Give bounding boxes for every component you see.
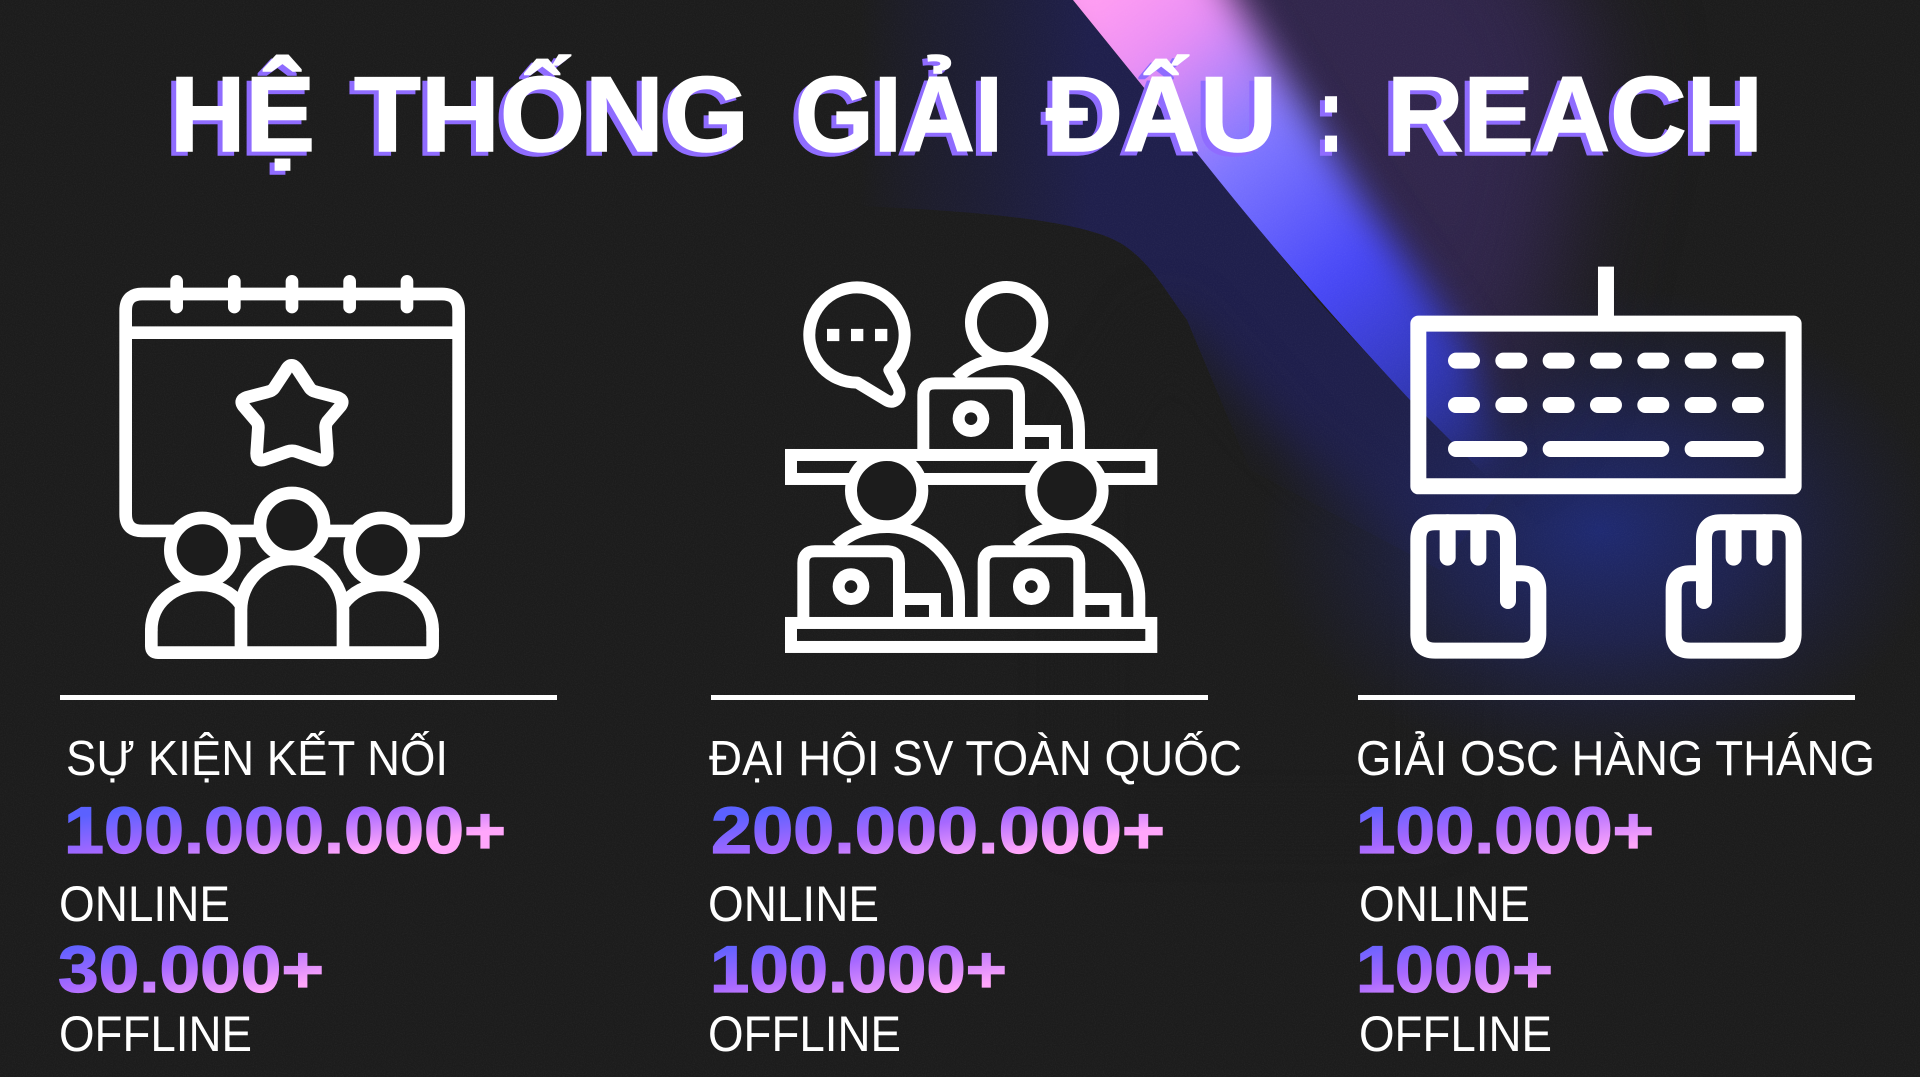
online label: ONLINE <box>1359 876 1530 932</box>
online label: ONLINE <box>59 876 230 932</box>
online number: 100.000+ <box>1356 793 1654 867</box>
title: HỆ <box>170 54 315 174</box>
panel: đại hội sv toàn quốc <box>708 695 1242 1062</box>
panel: sự kiện kết nối <box>58 695 557 1062</box>
background: navy glow left of the diagonal edge <box>860 0 1500 570</box>
offline number: 100.000+ <box>710 932 1007 1006</box>
background: soft dark fade over navy <box>1080 310 1440 820</box>
online number: 200.000.000+ <box>711 793 1165 867</box>
offline number: 30.000+ <box>58 932 324 1006</box>
online number: 100.000.000+ <box>64 793 506 867</box>
icon: people with laptops and chat bubble <box>791 287 1151 647</box>
offline label: OFFLINE <box>708 1006 901 1062</box>
background: glow below the keyboard <box>1260 285 1920 775</box>
title: GIẢI <box>795 54 1003 174</box>
title: THỐNG <box>354 54 749 174</box>
icon: calendar with star and audience <box>126 281 459 653</box>
offline number: 1000+ <box>1356 932 1553 1006</box>
heading: GIẢI OSC HÀNG THÁNG <box>1356 731 1875 786</box>
title <box>170 54 1763 174</box>
title: ĐẤU <box>1046 54 1277 174</box>
background: light beam right of the diagonal edge <box>980 0 1600 470</box>
icon: keyboard and hands <box>1418 267 1794 651</box>
panel: giải osc hàng tháng <box>1356 695 1875 1062</box>
title: : <box>1318 54 1344 174</box>
online label: ONLINE <box>708 876 879 932</box>
heading: SỰ KIỆN KẾT NỐI <box>66 731 448 786</box>
offline label: OFFLINE <box>59 1006 252 1062</box>
heading: ĐẠI HỘI SV TOÀN QUỐC <box>709 731 1242 786</box>
title: REACH <box>1387 54 1763 174</box>
offline label: OFFLINE <box>1359 1006 1552 1062</box>
